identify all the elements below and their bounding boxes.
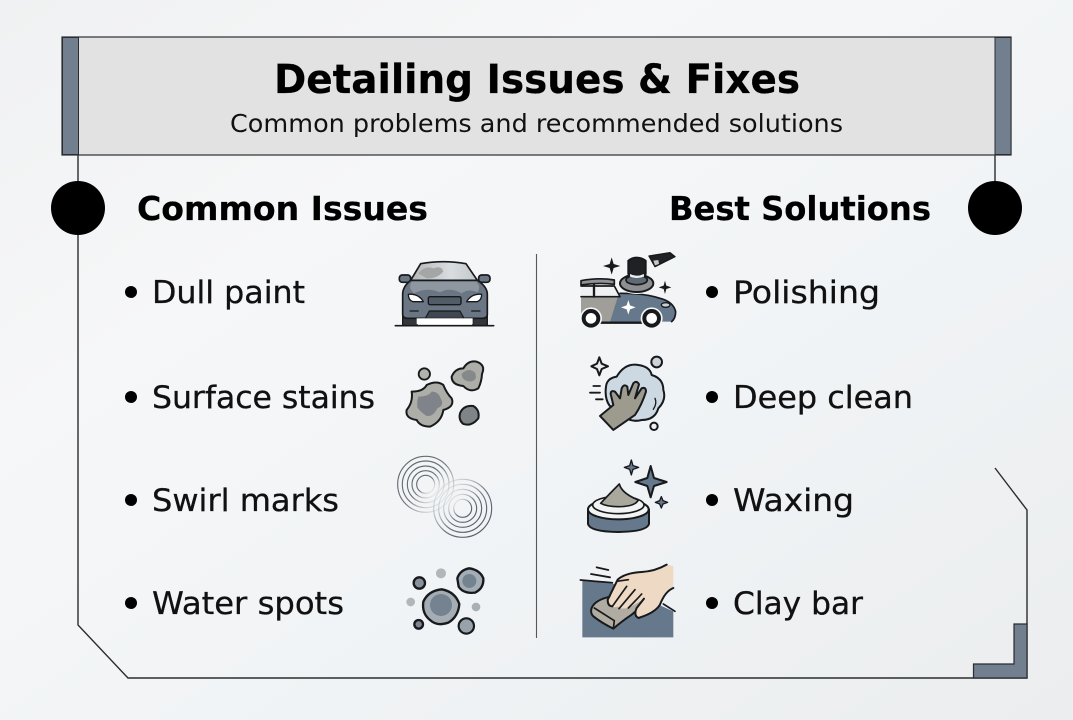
panel: title banner <box>62 37 1011 155</box>
icon: polishing car <box>580 253 676 329</box>
outer frame line <box>78 155 1027 678</box>
right node circle <box>968 181 1022 235</box>
icon: swirl marks <box>398 456 492 537</box>
left node circle <box>51 181 105 235</box>
list: common issues: Water spots <box>152 586 344 622</box>
icon: water spots <box>406 568 483 634</box>
corner accent <box>974 624 1027 678</box>
list: best solutions: Deep clean <box>733 380 913 416</box>
title: Detailing Issues & Fixes <box>274 57 800 103</box>
heading: common issues: Common Issues <box>137 189 428 228</box>
list: best solutions: Polishing <box>733 275 880 311</box>
list: common issues: Surface stains <box>152 380 375 416</box>
list: best solutions: Waxing <box>733 483 854 519</box>
list: best solutions <box>706 275 913 622</box>
column divider <box>536 254 538 638</box>
icon: waxing <box>588 460 668 532</box>
list: best solutions: Clay bar <box>733 586 863 622</box>
icon: surface stains <box>406 361 483 427</box>
heading: best solutions: Best Solutions <box>669 189 931 228</box>
list: common issues: Dull paint <box>152 275 305 311</box>
subtitle: Common problems and recommended solutions <box>230 109 843 138</box>
icon: deep clean <box>590 357 664 430</box>
list: common issues: Swirl marks <box>152 483 339 519</box>
list: common issues <box>125 275 375 622</box>
icon: dull car <box>395 262 494 326</box>
icon: clay bar <box>580 565 675 637</box>
